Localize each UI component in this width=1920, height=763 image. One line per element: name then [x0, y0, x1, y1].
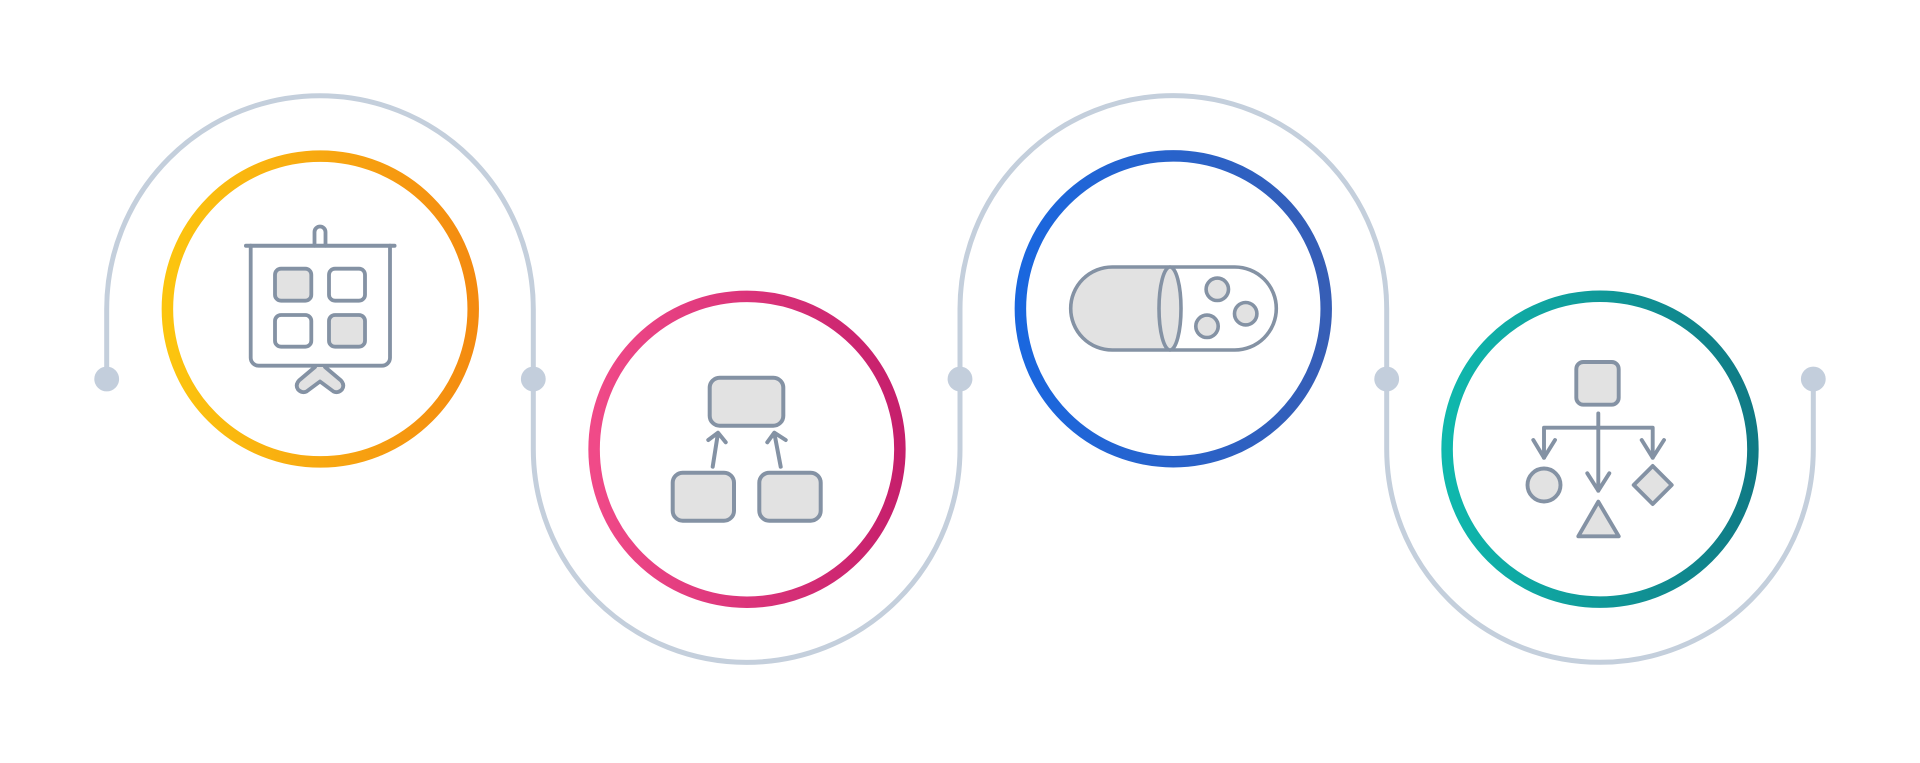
icon: shape hierarchy: [1528, 362, 1672, 536]
ring: step 2 pink: [594, 296, 900, 602]
connector path: [107, 96, 1813, 662]
icon: capsule: [1071, 267, 1276, 350]
connector dots: [94, 367, 1826, 391]
ring: step 4 teal: [1447, 296, 1753, 602]
ring: step 1 orange: [167, 156, 473, 462]
ring: step 3 blue: [1020, 156, 1326, 462]
icon: flow to top box: [673, 378, 821, 521]
icon: presentation board: [246, 227, 394, 392]
